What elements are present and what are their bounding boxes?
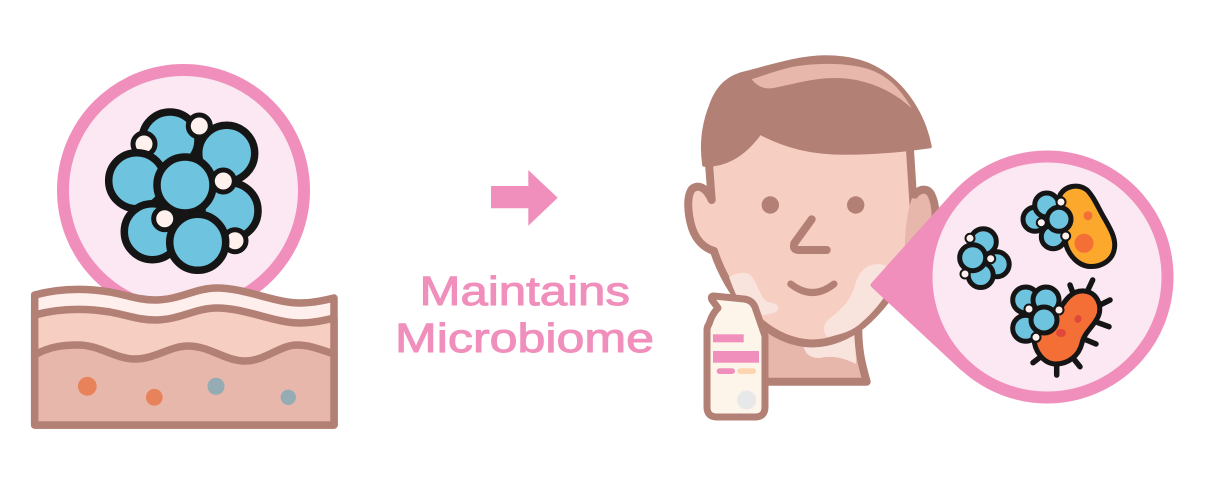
skin particles	[78, 377, 296, 406]
hair	[703, 57, 930, 165]
panel: healthy skin with magnified microbiome	[35, 70, 334, 425]
skin cross-section	[35, 288, 334, 425]
red bacterium with microbes	[1013, 280, 1110, 375]
light skin patches	[729, 264, 898, 337]
right ear shading	[905, 197, 931, 262]
hair highlight	[752, 64, 912, 108]
caption: Maintains Microbiome	[395, 268, 654, 361]
neck	[760, 325, 867, 382]
bottle label	[713, 334, 759, 410]
arrow	[491, 170, 558, 226]
callout circle	[926, 156, 1168, 398]
magnifier callout: facial microbiome	[873, 156, 1168, 398]
icon: microbe cluster	[109, 112, 258, 270]
caption: Maintains Microbiome: Maintains	[420, 268, 630, 314]
cream bottle	[707, 296, 765, 417]
right ear	[905, 190, 936, 250]
eyes	[762, 196, 864, 214]
orange bacterium with microbes	[1023, 186, 1115, 267]
nose	[794, 219, 827, 250]
microbe cluster A	[960, 229, 1009, 288]
caption: Maintains Microbiome: Microbiome	[395, 315, 654, 361]
panel: man's face with skincare	[688, 57, 936, 417]
face	[688, 110, 915, 344]
callout pointer	[873, 194, 1047, 368]
magnifier circle: skin microbiome	[63, 70, 304, 311]
mouth	[791, 284, 834, 292]
